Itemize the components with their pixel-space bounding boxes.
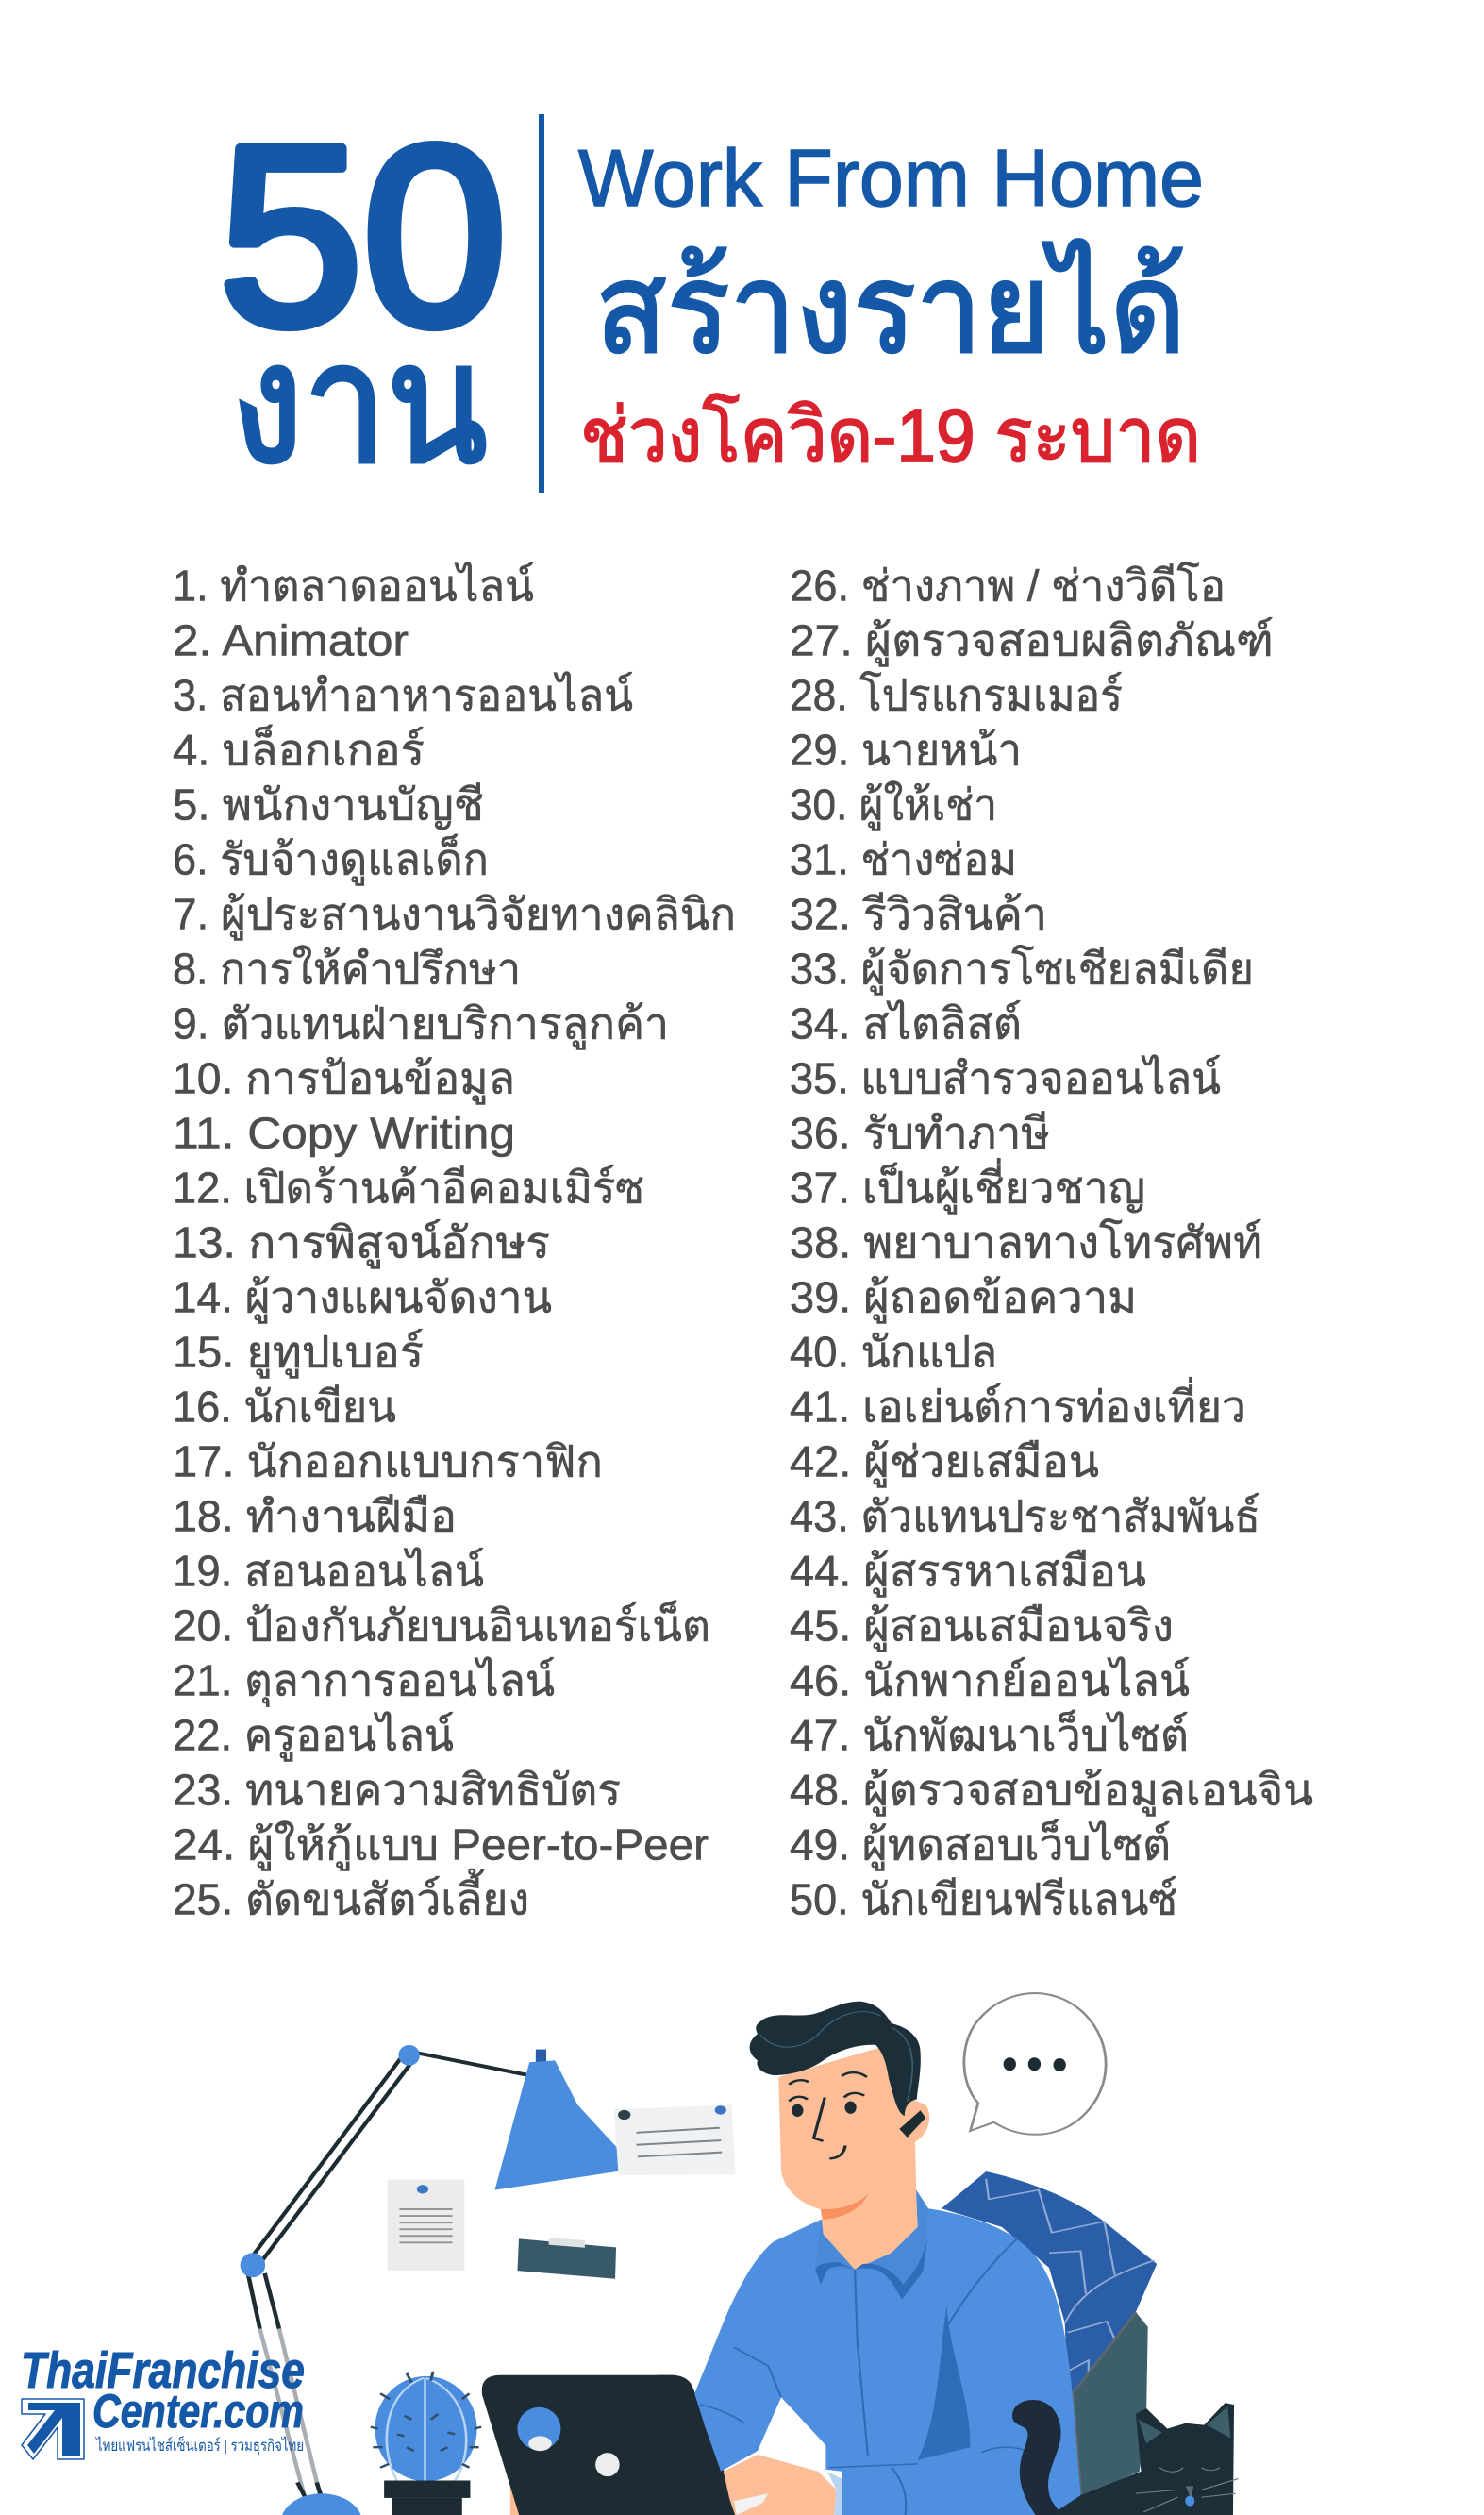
list column 1: jobs 1 to 25: 7. ผู้ประสานงานวิจัยทางคลินิก [173,889,736,940]
list column 2: jobs 26 to 50: 49. ผู้ทดสอบเว็บไซต์ [790,1819,1171,1870]
subheading: ช่วงโควิด-19 ระบาด: ช่วงโควิด-19 ระบาด [580,393,1201,478]
icon: logo arrow [22,2399,84,2459]
list column 2: jobs 26 to 50: 32. รีวิวสินค้า [790,889,1047,938]
heading: Work From Home: Work From Home [578,134,1204,224]
icon: laptop edge [658,2375,737,2515]
list column 1: jobs 1 to 25: 1. ทำตลาดออนไลน์ [173,561,534,610]
icon: person hand and cuff [724,2455,842,2515]
icon: chair back [942,2171,1157,2497]
list column 2: jobs 26 to 50: 35. แบบสำรวจออนไลน์ [790,1053,1221,1102]
list column 2: jobs 26 to 50: 36. รับทำภาษี [790,1108,1050,1157]
icon: hand at laptop left [510,2482,520,2515]
list column 2: jobs 26 to 50: 33. ผู้จัดการโซเชียลมีเดีย [790,944,1254,995]
list column 2: jobs 26 to 50: 31. ช่างซ่อม [790,834,1017,883]
illustration: desk scene left part [241,2045,742,2515]
logo tagline: ไทยแฟรนไชส์เซ็นเตอร์ | รวมธุรกิจไทย [94,2435,304,2456]
title: งาน: งาน [231,310,488,497]
list column 2: jobs 26 to 50: 30. ผู้ให้เช่า [790,780,997,830]
list column 1: jobs 1 to 25: 12. เปิดร้านค้าอีคอมเมิร์ซ [173,1163,644,1212]
list column 1: jobs 1 to 25: 16. นักเขียน [173,1382,396,1431]
list column 2: jobs 26 to 50 [790,561,1313,1923]
list column 2: jobs 26 to 50: 47. นักพัฒนาเว็บไซต์ [790,1710,1189,1759]
icon: black cat [1012,2400,1238,2515]
logo wordmark: Center.com: Center.com [92,2385,304,2438]
icon: speech bubble [964,1993,1106,2135]
list column 2: jobs 26 to 50: 27. ผู้ตรวจสอบผลิตภัณฑ์ [790,615,1274,666]
title divider [539,114,544,493]
list column 1: jobs 1 to 25: 8. การให้คำปรึกษา [173,944,521,993]
list column 2: jobs 26 to 50: 40. นักแปล [790,1327,997,1376]
list column 2: jobs 26 to 50: 48. ผู้ตรวจสอบข้อมูลเอนจิน [790,1765,1313,1816]
list column 1: jobs 1 to 25: 14. ผู้วางแผนจัดงาน [173,1272,552,1323]
list column 1: jobs 1 to 25: 2. Animator [173,615,409,664]
list column 2: jobs 26 to 50: 38. พยาบาลทางโทรศัพท์ [790,1217,1262,1266]
list column 1: jobs 1 to 25: 10. การป้อนข้อมูล [173,1053,515,1104]
list column 2: jobs 26 to 50: 50. นักเขียนฟรีแลนซ์ [790,1874,1177,1923]
list column 1: jobs 1 to 25: 3. สอนทำอาหารออนไลน์ [173,670,633,719]
icon: person shirt [694,2190,1080,2515]
icon: clipboard [517,2238,616,2279]
list column 1: jobs 1 to 25: 15. ยูทูปเบอร์ [173,1327,424,1378]
list column 1: jobs 1 to 25: 5. พนักงานบัญชี [173,780,484,829]
heading: สร้างรายได้: สร้างรายได้ [595,240,1186,379]
list column 2: jobs 26 to 50: 37. เป็นผู้เชี่ยวชาญ [790,1157,1145,1214]
list column 2: jobs 26 to 50: 29. นายหน้า [790,725,1022,774]
list column 1: jobs 1 to 25: 17. นักออกแบบกราฟิก [173,1436,603,1485]
list column 1: jobs 1 to 25: 22. ครูออนไลน์ [173,1710,454,1761]
list column 2: jobs 26 to 50: 45. ผู้สอนเสมือนจริง [790,1601,1174,1652]
list column 1: jobs 1 to 25: 6. รับจ้างดูแลเด็ก [173,834,489,885]
list column 1: jobs 1 to 25: 9. ตัวแทนฝ่ายบริการลูกค้า [173,998,669,1049]
icon: pinned note [388,2180,464,2271]
icon: person hair [750,2002,921,2116]
list column 1: jobs 1 to 25 [173,561,736,1923]
logo wordmark: ThaiFranchise: ThaiFranchise [21,2342,305,2399]
list column 2: jobs 26 to 50: 34. สไตลิสต์ [790,998,1022,1048]
list column 1: jobs 1 to 25: 21. ตุลาการออนไลน์ [173,1655,555,1708]
list column 2: jobs 26 to 50: 44. ผู้สรรหาเสมือน [790,1546,1146,1597]
list column 1: jobs 1 to 25: 19. สอนออนไลน์ [173,1546,484,1595]
list column 2: jobs 26 to 50: 26. ช่างภาพ / ช่างวิดีโอ [790,561,1226,610]
list column 2: jobs 26 to 50: 43. ตัวแทนประชาสัมพันธ์ [790,1491,1260,1540]
list column 1: jobs 1 to 25: 25. ตัดขนสัตว์เลี้ยง [173,1869,529,1923]
list column 1: jobs 1 to 25: 24. ผู้ให้กู้แบบ Peer-to-Peer [173,1819,709,1870]
list column 2: jobs 26 to 50: 41. เอเย่นต์การท่องเที่ยว [790,1376,1246,1431]
title: 50: 50 [219,94,507,378]
title block [219,94,1204,497]
list column 1: jobs 1 to 25: 11. Copy Writing [173,1108,515,1157]
list column 2: jobs 26 to 50: 39. ผู้ถอดข้อความ [790,1272,1137,1323]
icon: cactus [371,2372,481,2515]
list column 1: jobs 1 to 25: 20. ป้องกันภัยบนอินเทอร์เน็ต [173,1601,710,1650]
icon: desk lamp [241,2045,636,2515]
illustration: person, speech bubble, chair, cat [658,1993,1238,2515]
list column 1: jobs 1 to 25: 18. ทำงานฝีมือ [173,1491,457,1540]
icon: pinned sheet [614,2104,736,2175]
icon: person collar [815,2190,928,2299]
list column 1: jobs 1 to 25: 4. บล็อกเกอร์ [173,725,425,774]
icon: person face and neck [778,2046,929,2270]
icon: laptop [482,2375,742,2515]
list column 1: jobs 1 to 25: 13. การพิสูจน์อักษร [173,1217,550,1268]
list column 1: jobs 1 to 25: 23. ทนายความสิทธิบัตร [173,1765,621,1814]
logo: ThaiFranchise Center.com [21,2342,305,2459]
list column 2: jobs 26 to 50: 46. นักพากย์ออนไลน์ [790,1655,1190,1704]
list column 2: jobs 26 to 50: 28. โปรแกรมเมอร์ [790,670,1123,719]
list column 2: jobs 26 to 50: 42. ผู้ช่วยเสมือน [790,1436,1099,1487]
